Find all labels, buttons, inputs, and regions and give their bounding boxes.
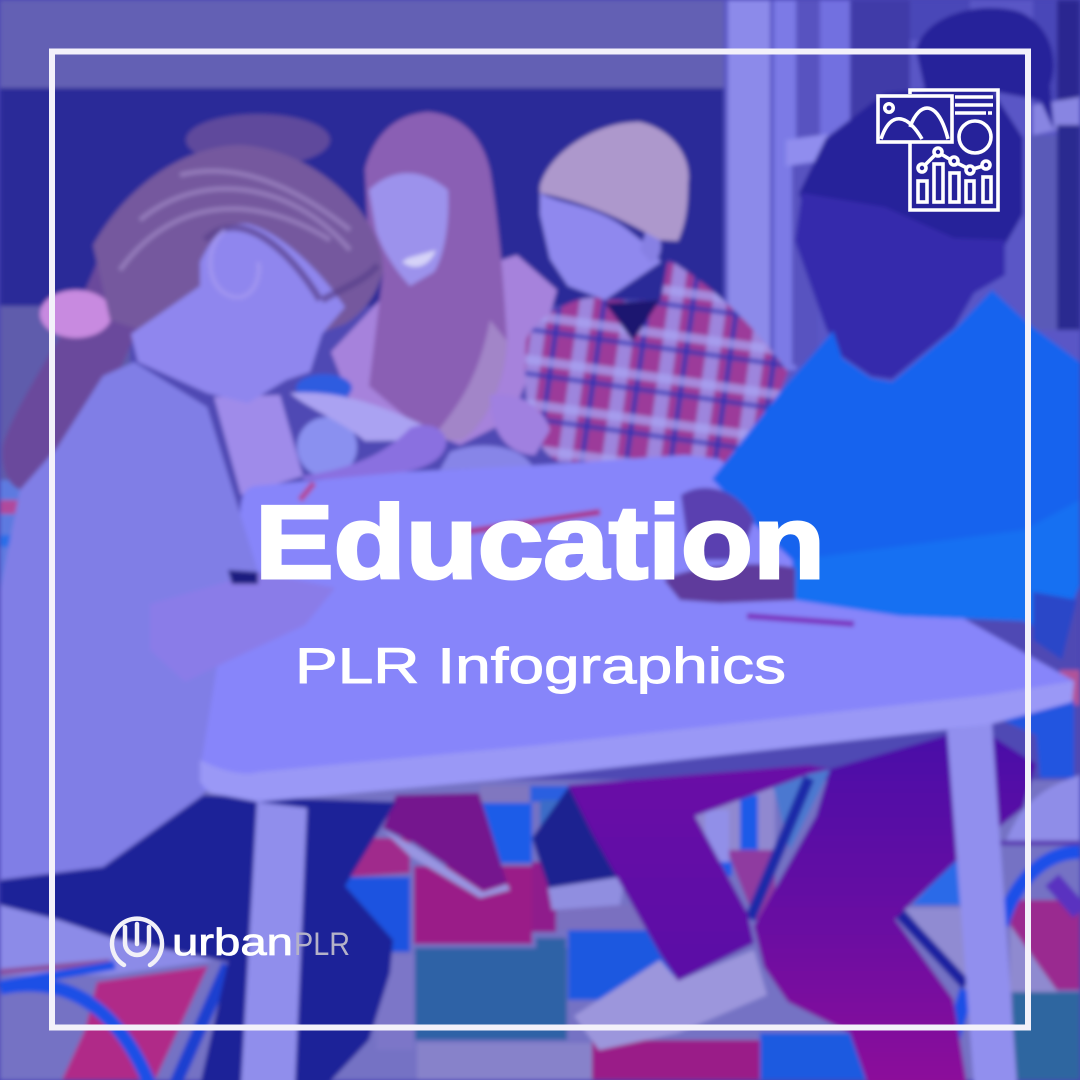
right girl jumper	[712, 290, 1080, 660]
left girl shirt	[0, 362, 258, 880]
right girl hands	[664, 488, 795, 603]
basket	[788, 448, 834, 532]
table legs	[241, 724, 1017, 1080]
left stool	[0, 880, 228, 1080]
pants	[568, 735, 1036, 1080]
left girl jeans	[0, 795, 396, 1080]
right girl face	[795, 193, 1005, 379]
logo: urbanPLR	[112, 919, 350, 965]
boy in plaid shirt	[490, 122, 788, 462]
blue below table	[992, 700, 1074, 778]
woman with long hair	[331, 112, 557, 445]
logo mark	[112, 919, 162, 965]
subtitle: PLR Infographics	[295, 638, 786, 694]
title: Education	[255, 485, 825, 601]
left girl hair, braid and face	[2, 114, 383, 490]
window frames	[724, 0, 1080, 400]
pencils	[300, 483, 854, 624]
logo wordmark PLR: PLR	[294, 926, 350, 962]
shoe	[574, 950, 767, 1050]
table top	[200, 455, 1074, 802]
back shoes	[383, 785, 626, 910]
second child and toys	[214, 374, 532, 495]
icon: infographic document	[878, 90, 998, 210]
right stool and chair	[705, 775, 1080, 1080]
logo wordmark urban: urban	[172, 922, 293, 964]
right girl bun and hair	[799, 8, 1054, 260]
left girl sleeve and arm	[125, 407, 335, 682]
floor tiles	[0, 480, 1080, 1080]
